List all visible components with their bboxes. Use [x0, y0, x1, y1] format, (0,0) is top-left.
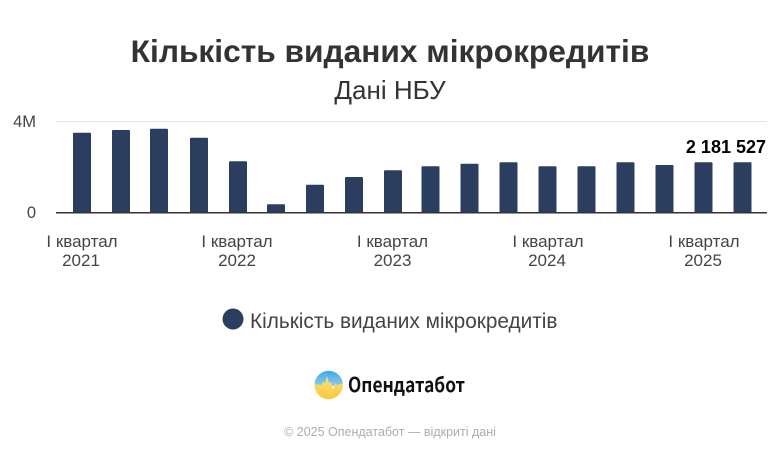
x-axis labels: 2025 — [684, 251, 722, 270]
x-axis labels: І квартал — [668, 232, 740, 251]
x-axis labels — [46, 232, 740, 270]
legend marker — [222, 308, 244, 330]
x-axis labels: І квартал — [357, 232, 428, 251]
legend label: Кількість виданих мікрокредитів — [250, 310, 557, 333]
logo wordmark: Опендатабот — [348, 369, 465, 398]
logo: Опендатабот — [314, 369, 465, 400]
icon: logo circle — [314, 370, 344, 400]
y-axis labels: 4M — [13, 113, 36, 131]
footer: © 2025 Опендатабот — відкриті дані — [284, 425, 496, 439]
bars — [73, 129, 752, 212]
x-axis labels: 2024 — [528, 251, 566, 270]
x-axis labels: І квартал — [46, 232, 118, 251]
subtitle: Дані НБУ — [334, 75, 446, 105]
x-axis labels: 2022 — [218, 251, 256, 270]
y-axis labels — [13, 113, 36, 222]
value label: 2 181 527 — [686, 137, 766, 157]
x-axis labels: 2021 — [62, 251, 100, 270]
y-axis labels: 0 — [27, 204, 36, 222]
bar chart — [13, 113, 767, 270]
title: Кількість виданих мікрокредитів — [131, 33, 649, 69]
legend — [222, 308, 557, 333]
x-axis labels: І квартал — [512, 232, 584, 251]
x-axis labels: 2023 — [374, 251, 411, 270]
x-axis labels: І квартал — [201, 232, 273, 251]
